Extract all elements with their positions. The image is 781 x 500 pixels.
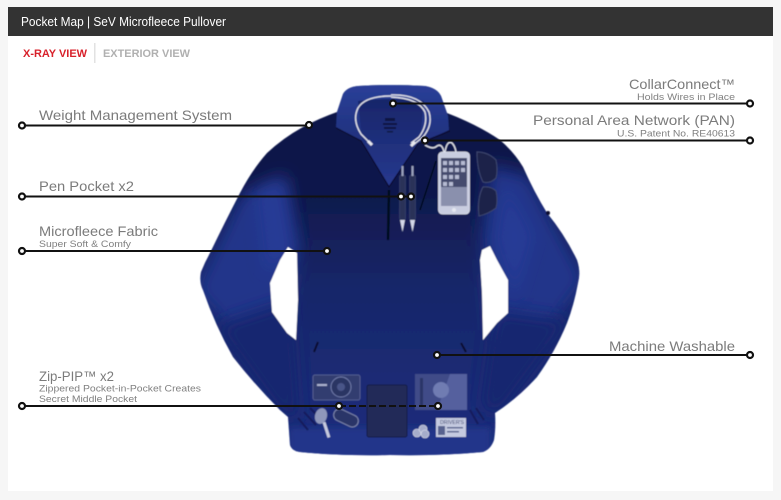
label: personal area network xyxy=(422,112,753,144)
label: zip-pip: Secret Middle Pocket xyxy=(39,394,137,405)
icon: passport xyxy=(415,374,467,410)
label: zip-pip: Zip-PIP™ x2 xyxy=(39,368,114,384)
left armpit gap xyxy=(270,247,298,340)
icon: sunglasses xyxy=(477,152,497,216)
label: microfleece fabric xyxy=(19,223,330,254)
label: pen pocket xyxy=(19,178,414,200)
label: weight management system xyxy=(19,107,312,128)
label: zip-pip: Zippered Pocket-in-Pocket Creates xyxy=(39,384,201,394)
cuff ribbing xyxy=(298,408,484,430)
hand pocket slits xyxy=(314,342,318,352)
label: weight management system: Weight Management System xyxy=(39,107,232,123)
collar edge xyxy=(336,128,450,187)
wire plugs xyxy=(368,141,415,146)
icon: pens xyxy=(400,166,416,232)
label: collarconnect: CollarConnect™ xyxy=(629,76,735,92)
collar xyxy=(336,85,450,187)
icon: driver license xyxy=(436,418,466,437)
icon: keys xyxy=(313,407,360,438)
jacket xyxy=(190,80,590,460)
neck label xyxy=(383,118,397,132)
tab: exterior view: EXTERIOR VIEW xyxy=(103,48,191,60)
sleeve dart xyxy=(546,211,550,215)
label: collarconnect xyxy=(390,76,753,106)
header title: Pocket Map | SeV Microfleece Pullover xyxy=(21,15,226,29)
icon: camera xyxy=(313,375,360,400)
right sleeve shading xyxy=(482,165,585,340)
icon: phone xyxy=(438,152,470,214)
label: microfleece fabric: Super Soft & Comfy xyxy=(39,239,131,250)
right armpit gap xyxy=(480,246,508,340)
jacket silhouette xyxy=(190,80,590,460)
icon: coins xyxy=(413,425,429,438)
icon: wallet xyxy=(367,385,407,437)
header bar xyxy=(8,7,773,36)
icon: driver license: DRIVER'S xyxy=(440,420,465,426)
label: machine washable xyxy=(434,338,753,358)
left sleeve shading xyxy=(195,175,298,340)
view tabs xyxy=(23,43,191,63)
chest pocket zip xyxy=(420,161,436,210)
label: pen pocket: Pen Pocket x2 xyxy=(39,178,134,194)
label: zip-pip xyxy=(19,368,441,409)
center zipper xyxy=(388,190,389,240)
tab: x-ray view: X-RAY VIEW xyxy=(23,48,88,60)
label: personal area network: Personal Area Network (PAN) xyxy=(533,112,735,128)
label: machine washable: Machine Washable xyxy=(609,338,735,354)
label: personal area network: U.S. Patent No. RE40613 xyxy=(617,128,735,140)
label: microfleece fabric: Microfleece Fabric xyxy=(39,223,158,239)
collar wires xyxy=(356,95,456,152)
label: collarconnect: Holds Wires in Place xyxy=(637,92,735,103)
